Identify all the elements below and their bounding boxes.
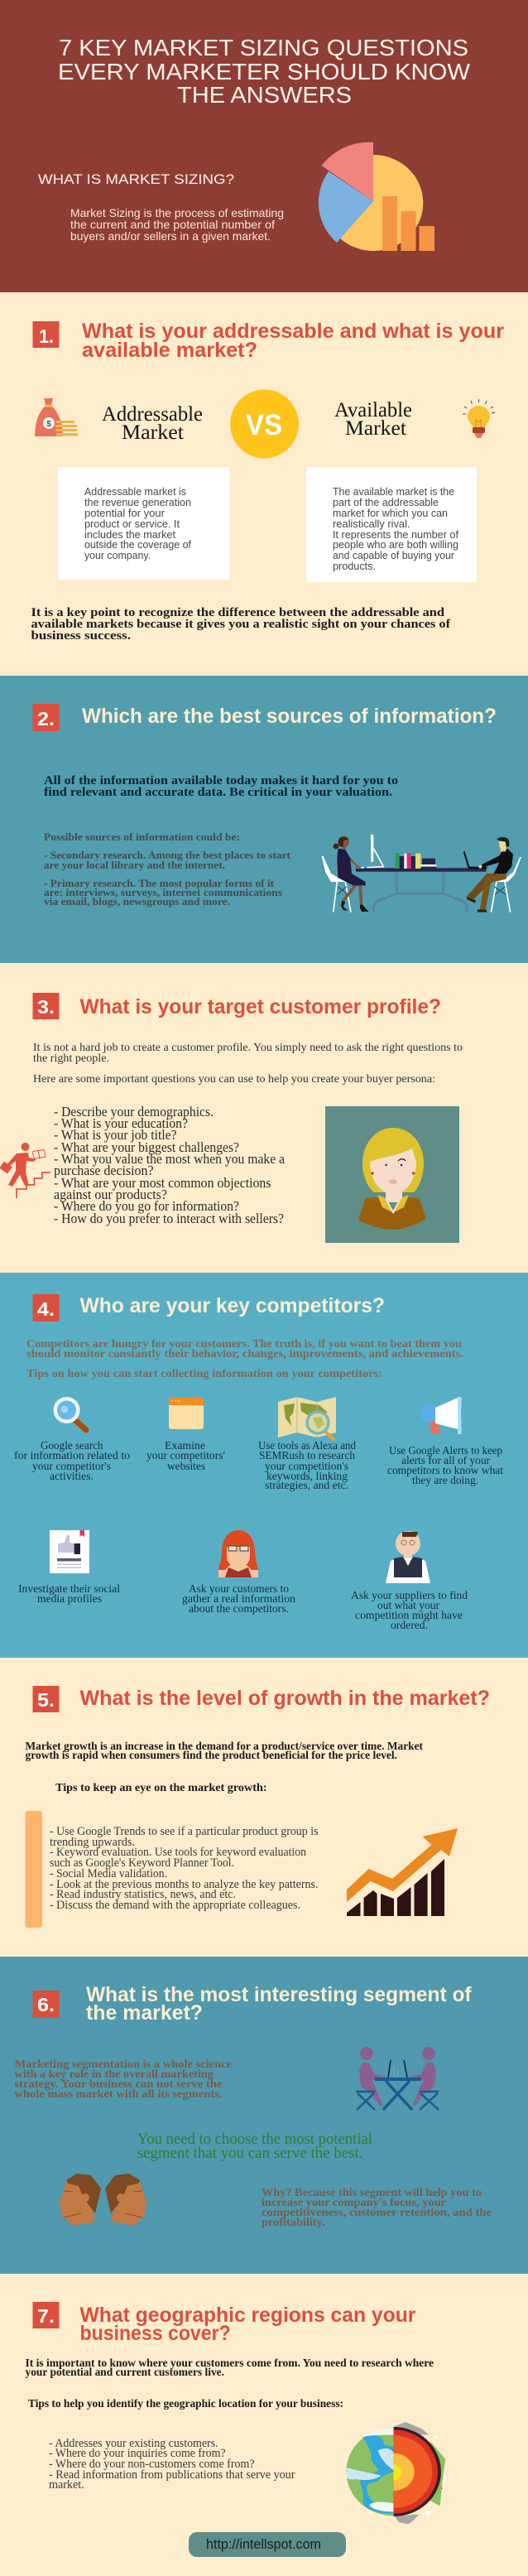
caption: alexa and semrush: SEMRush to research <box>259 1450 355 1462</box>
heading 1: What is your addressable and what is your <box>82 320 504 343</box>
books <box>396 853 436 869</box>
text block: question list: - How do you prefer to interact with sellers? <box>54 1211 284 1226</box>
card: available market: It represents the number of <box>333 528 458 541</box>
man on chair <box>464 837 521 912</box>
button: website url <box>189 2532 346 2557</box>
card: available market: people who are both willing <box>333 538 458 551</box>
number badge 5: 5. <box>37 1689 55 1711</box>
heading 6: What is the most interesting segment of <box>86 1983 472 2006</box>
text block: key point: It is a key point to recognize the difference between the addressable and <box>31 606 444 619</box>
caption: examine websites: Examine <box>165 1440 205 1452</box>
text block: definition <box>25 1740 423 1761</box>
heading 5: What is the level of growth in the market? <box>79 1687 490 1710</box>
decorative column: orange bar <box>25 1811 42 1928</box>
vs badge <box>230 389 299 459</box>
card: available market <box>306 467 477 582</box>
text block: definition: Market Sizing is the process of estimating <box>70 206 284 219</box>
text block: possible sources: are: interviews, surveys, internet communications <box>44 886 282 898</box>
table <box>356 868 486 912</box>
caption: social media: media profiles <box>37 1593 102 1606</box>
icon: light bulb <box>463 399 495 438</box>
text block: possible sources: - Primary research. The most popular forms of it <box>44 877 275 889</box>
text block: why: Why? Because this segment will help you to <box>262 2187 482 2199</box>
text block: tips list <box>49 2437 295 2492</box>
caption: ask suppliers: ordered. <box>391 1620 428 1632</box>
subheading: tips: Tips to keep an eye on the market growth: <box>55 1782 267 1794</box>
number badge 4 <box>33 1294 60 1322</box>
caption: alexa and semrush: keywords, linking <box>266 1471 348 1483</box>
caption: ask customers: gather a real information <box>182 1593 295 1606</box>
text block: question list: - What is your job title? <box>54 1127 177 1143</box>
icon: money bag: $ <box>46 420 51 429</box>
heading 3: What is your target customer profile? <box>79 995 441 1018</box>
icon: browser window <box>169 1398 204 1429</box>
caption: google search: for information related to <box>14 1450 130 1462</box>
text block: intro: It is not a hard job to create a customer profile. You simply need to ask the right questions to <box>33 1042 463 1054</box>
text block: tips list: - Social Media validation. <box>50 1867 167 1880</box>
text block: tips list: - Look at the previous months to analyze the key patterns. <box>50 1878 318 1891</box>
caption: ask customers: about the competitors. <box>189 1603 289 1615</box>
text block: why: profitability. <box>262 2217 325 2229</box>
text block: definition <box>70 206 284 243</box>
panel: section 3 <box>0 963 528 1273</box>
title: THE ANSWERS <box>177 82 352 108</box>
heading 1 <box>82 320 504 362</box>
caption: ask customers <box>182 1583 295 1615</box>
subheading: tips: Tips to help you identify the geographic location for your business: <box>28 2398 343 2410</box>
text block: intro <box>26 1338 463 1380</box>
text block: intro: Competitors are hungry for your customers. The truth is, if you want to beat them you <box>26 1338 462 1351</box>
caption: social media: Investigate their social <box>18 1583 120 1596</box>
heading 7 <box>79 2304 416 2345</box>
text block: segmentation: strategy. Your business can not serve the <box>15 2078 222 2091</box>
card: available market: products. <box>333 560 376 572</box>
text block: intro: Here are some important questions you can use to help you create your buyer persona: <box>33 1073 435 1086</box>
caption: google alerts <box>387 1445 503 1487</box>
panel: section 6 <box>0 1957 528 2274</box>
caption: google alerts: Use Google Alerts to keep <box>389 1445 502 1457</box>
number badge 7 <box>33 2302 60 2328</box>
caption: examine websites <box>146 1440 225 1473</box>
icon: pie chart with bars <box>319 142 434 251</box>
callout: choose the best segment: segment that you can serve the best. <box>137 2145 363 2162</box>
label: available market: Available <box>334 399 412 421</box>
label: addressable market: Addressable <box>102 403 203 426</box>
caption: ask suppliers: Ask your suppliers to find <box>351 1590 468 1602</box>
card: addressable market: product or service. It <box>84 518 180 530</box>
caption: ask suppliers: competition might have <box>355 1610 463 1622</box>
monitor <box>358 834 383 869</box>
caption: examine websites: websites <box>167 1461 205 1473</box>
text block: question list: - What is your education? <box>54 1115 188 1131</box>
card: addressable market: Addressable market is <box>84 485 186 498</box>
caption: ask suppliers: out what your <box>377 1600 439 1612</box>
card: available market: market for which you can <box>333 507 448 519</box>
card: addressable market <box>58 467 230 580</box>
text block: tips list: - Discuss the demand with the appropriate colleagues. <box>50 1899 300 1912</box>
text block: tips list <box>50 1825 319 1912</box>
text block: why <box>262 2187 492 2229</box>
panel: section 1 <box>0 292 528 676</box>
card: addressable market: your company. <box>84 549 151 561</box>
button: website url: http://intellspot.com <box>206 2536 321 2552</box>
label: available market: Market <box>345 417 406 440</box>
text block: why: competitiveness, customer retention, and the <box>262 2207 492 2219</box>
caption: google search <box>14 1440 130 1483</box>
icon: magnifier <box>53 1397 86 1430</box>
caption: ask customers: Ask your customers to <box>189 1583 289 1596</box>
text block: key point: business success. <box>31 629 131 643</box>
number badge 1: 1. <box>39 325 54 347</box>
caption: google alerts: they are doing. <box>412 1475 478 1487</box>
text block: tips list: - Addresses your existing customers. <box>49 2437 218 2450</box>
text block: intro: the right people. <box>33 1052 109 1065</box>
text block: question list: - What are your biggest challenges? <box>54 1139 239 1155</box>
text block: question list: purchase decision? <box>54 1163 154 1178</box>
text block: intro: find relevant and accurate data. Be critical in your valuation. <box>44 786 392 799</box>
icon: megaphone <box>421 1397 463 1434</box>
text block: definition: buyers and/or sellers in a given market. <box>70 229 271 243</box>
card: addressable market: includes the market <box>84 528 175 541</box>
text block: intro: It is important to know where your customers come from. You need to research where <box>25 2357 434 2370</box>
heading 7: What geographic regions can your <box>79 2304 416 2327</box>
heading 1: available market? <box>82 339 257 362</box>
card: addressable market: potential for your <box>84 507 166 519</box>
card: available market: realistically rival. <box>333 518 410 530</box>
text block: question list: - Where do you go for information? <box>54 1198 239 1214</box>
text block: segmentation: Marketing segmentation is a whole science <box>15 2058 232 2071</box>
text block: tips list: trending upwards. <box>50 1836 135 1849</box>
illustration: customer portrait <box>325 1106 459 1243</box>
panel: section 4 <box>0 1273 528 1658</box>
text block: tips list: - Read information from publications that serve your <box>49 2468 295 2482</box>
text block: intro <box>25 2357 434 2379</box>
text block: question list: - What you value the most when you make a <box>54 1151 286 1167</box>
icon: man with glasses <box>386 1531 430 1583</box>
text block: intro <box>44 774 398 799</box>
text block: possible sources: via email, blogs, newsgroups and more. <box>44 895 230 908</box>
subheading: what is market sizing: WHAT IS MARKET SIZING? <box>38 171 234 187</box>
card: available market: The available market is the <box>333 485 454 498</box>
heading 6 <box>86 1983 472 2025</box>
text block: intro: your potential and current customers live. <box>25 2367 224 2379</box>
card: addressable market: outside the coverage of <box>84 538 191 551</box>
text block: intro: All of the information available today makes it hard for you to <box>44 774 398 787</box>
card: addressable market: the revenue generation <box>84 496 191 508</box>
text block: key point: available markets because it gives you a realistic sight on your chances of <box>31 618 450 631</box>
text block: key point <box>31 606 450 643</box>
text block: segmentation: whole mass market with all its segments. <box>15 2088 222 2101</box>
number badge 5 <box>33 1686 60 1712</box>
number badge 7: 7. <box>37 2305 55 2327</box>
caption: social media <box>18 1583 120 1606</box>
title: 7 KEY MARKET SIZING QUESTIONS <box>59 35 468 60</box>
text block: possible sources: Possible sources of information could be: <box>44 831 240 843</box>
callout: choose the best segment <box>137 2131 372 2162</box>
number badge 3 <box>33 993 60 1019</box>
number badge 2 <box>33 704 60 731</box>
text block: possible sources <box>44 831 291 908</box>
panel: header <box>0 0 528 292</box>
label: available market <box>334 399 412 440</box>
text block: question list: against our products? <box>54 1187 167 1202</box>
icon: money bag <box>35 398 78 436</box>
icon: man climbing stairs <box>0 1143 50 1198</box>
caption: alexa and semrush <box>258 1440 356 1492</box>
caption: alexa and semrush: Use tools as Alexa and <box>258 1440 356 1452</box>
heading 2: Which are the best sources of information? <box>82 705 497 728</box>
text block: question list: - Describe your demographics. <box>54 1104 214 1119</box>
text block: question list: - What are your most common objections <box>54 1175 271 1191</box>
caption: google search: Google search <box>41 1440 103 1452</box>
icon: two heads back to back <box>59 2174 147 2226</box>
text block: definition: the current and the potential number of <box>70 218 275 231</box>
woman on chair <box>321 836 369 912</box>
caption: ask suppliers <box>351 1590 468 1632</box>
text block: definition: growth is rapid when consumers find the product beneficial for the price level. <box>25 1749 397 1761</box>
heading 7: business cover? <box>79 2322 231 2345</box>
caption: alexa and semrush: your competition's <box>265 1461 348 1473</box>
icon: map with magnifier <box>278 1397 336 1439</box>
title <box>58 35 471 108</box>
panel: section 5 <box>0 1658 528 1957</box>
card: available market: and capable of buying your <box>333 549 455 561</box>
number badge 4: 4. <box>37 1298 55 1320</box>
icon: two people at a table <box>356 2047 439 2110</box>
vs badge: VS <box>246 409 282 441</box>
number badge 3: 3. <box>37 996 55 1018</box>
text block: why: increase your company's focus, your <box>262 2197 446 2209</box>
number badge 1 <box>33 321 60 348</box>
text block: tips list: - Use Google Trends to see if a particular product group is <box>50 1825 319 1838</box>
text block: intro <box>33 1042 463 1086</box>
card: available market: part of the addressable <box>333 496 439 508</box>
text block: segmentation: with a key role in the overall marketing <box>15 2068 214 2081</box>
text block: possible sources: - Secondary research. Among the best places to start <box>44 849 291 861</box>
text block: tips list: market. <box>49 2478 84 2492</box>
text block: tips list: - Where do your non-customers come from? <box>49 2458 255 2471</box>
label: addressable market: Market <box>122 421 184 444</box>
caption: google search: your competitor's <box>32 1461 111 1473</box>
number badge 6: 6. <box>37 1994 55 2015</box>
icon: red haired woman <box>218 1530 258 1577</box>
text block: segmentation <box>15 2058 232 2101</box>
icon: globe cross-section <box>346 2422 447 2524</box>
text block: question list <box>54 1104 286 1226</box>
caption: alexa and semrush: strategies, and etc. <box>265 1480 348 1492</box>
panel: section 2 <box>0 676 528 963</box>
text block: tips list: - Where do your inquiries come from? <box>49 2447 226 2460</box>
caption: google alerts: alerts for all of your <box>401 1455 490 1467</box>
caption: google search: activities. <box>50 1471 94 1483</box>
text block: possible sources: are your local library and the internet. <box>44 859 225 871</box>
text block: intro: Tips on how you can start collecting information on your competitors: <box>26 1368 382 1380</box>
caption: examine websites: your competitors' <box>146 1450 225 1462</box>
text block: tips list: such as Google's Keyword Planner Tool. <box>50 1856 234 1870</box>
panel: section 7 <box>0 2274 528 2576</box>
callout: choose the best segment: You need to choose the most potential <box>137 2131 372 2148</box>
illustration: two people at a desk <box>321 834 521 912</box>
number badge 6 <box>33 1991 60 2018</box>
label: addressable market <box>102 403 203 444</box>
icon: social media document <box>50 1530 89 1573</box>
caption: google alerts: competitors to know what <box>387 1465 503 1477</box>
text block: intro: should monitor constantly their behavior, changes, improvements, and achievements. <box>26 1348 463 1360</box>
text block: tips list: - Read industry statistics, news, and etc. <box>50 1888 236 1901</box>
text block: definition: Market growth is an increase in the demand for a product/service over time. Market <box>25 1740 423 1752</box>
title: EVERY MARKETER SHOULD KNOW <box>58 59 471 84</box>
heading 6: the market? <box>86 2001 203 2025</box>
heading 4: Who are your key competitors? <box>79 1294 385 1317</box>
icon: growth chart with arrow <box>347 1828 458 1916</box>
text block: tips list: - Keyword evaluation. Use tools for keyword evaluation <box>50 1846 306 1859</box>
number badge 2: 2. <box>37 708 55 729</box>
